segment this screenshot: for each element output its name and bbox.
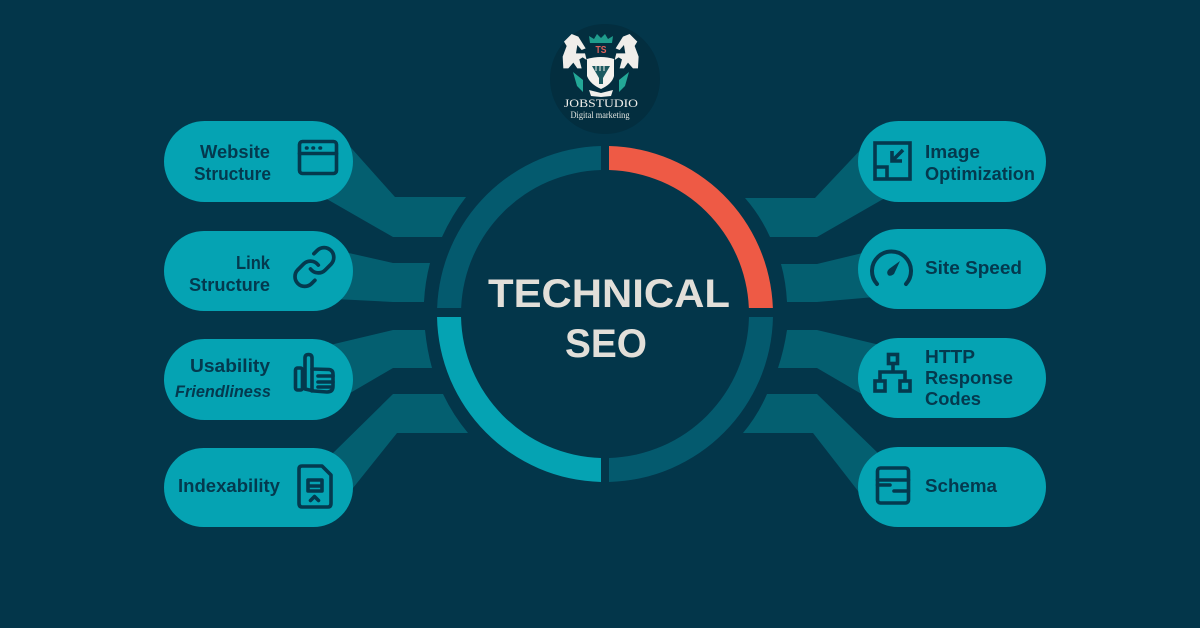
- label: image optimization: Optimization: [925, 164, 1035, 184]
- icon: resize image: [875, 143, 910, 179]
- connector: website structure: [325, 141, 466, 237]
- connector: image optimization: [745, 145, 885, 237]
- connector: http codes: [778, 330, 880, 396]
- label: site speed: Site Speed: [925, 258, 1022, 278]
- panel: site speed: [858, 229, 1046, 309]
- ring segment: bottom left: [437, 317, 601, 482]
- logo wordmark: JOBSTUDIO: [564, 96, 638, 110]
- label: indexability: Indexability: [178, 476, 280, 496]
- label: http response codes: Response: [925, 368, 1013, 388]
- panel: schema: [858, 447, 1046, 527]
- ribbon: [589, 90, 613, 97]
- title: [488, 272, 730, 366]
- icon: right leaves: [619, 72, 629, 92]
- icon: document: [299, 466, 331, 507]
- panel: website structure: [164, 121, 353, 202]
- ring segment: top right: [609, 146, 773, 308]
- logo tagline: Digital marketing: [570, 110, 630, 120]
- panel: usability friendliness: [164, 339, 353, 420]
- monogram: TS: [596, 45, 607, 56]
- connector: usability: [330, 330, 432, 396]
- label: link structure: Link: [236, 253, 271, 273]
- icon: schema layout: [878, 468, 908, 503]
- icon: left horse: [563, 34, 587, 68]
- logo: Jobstudio crest: [550, 24, 660, 134]
- icon: thumbs up: [296, 354, 333, 392]
- label: usability: Usability: [190, 356, 270, 376]
- label: image optimization: Image: [925, 142, 980, 162]
- icon: crown: [589, 34, 613, 43]
- label: http response codes: Codes: [925, 389, 981, 409]
- icon: left leaves: [573, 72, 583, 92]
- label: website structure: Website: [200, 142, 270, 162]
- panel: link structure: [164, 231, 353, 311]
- ring segment: top left: [437, 146, 601, 308]
- icon: browser window: [300, 142, 336, 174]
- label: friendliness: Friendliness: [175, 382, 271, 401]
- icon: speedometer: [872, 251, 911, 284]
- label: http response codes: HTTP: [925, 347, 975, 367]
- label: link structure: Structure: [189, 275, 270, 295]
- connector: indexability: [330, 394, 468, 498]
- panel: image optimization: [858, 121, 1046, 202]
- title: TECHNICAL: [488, 272, 730, 316]
- icon: shield: [587, 57, 614, 89]
- ring segment: bottom right: [609, 317, 773, 482]
- panel: http response codes: [858, 338, 1046, 418]
- connector: site speed: [781, 250, 875, 302]
- icon: right horse: [615, 34, 639, 68]
- title: SEO: [565, 322, 647, 366]
- connector: schema: [743, 394, 880, 500]
- icon: chain link: [295, 248, 334, 286]
- label: schema: Schema: [925, 476, 998, 496]
- ring chart: [437, 146, 773, 482]
- panel: indexability: [164, 448, 353, 527]
- connector: link structure: [335, 251, 430, 302]
- icon: sitemap: [875, 354, 910, 391]
- label: website structure: Structure: [194, 164, 271, 184]
- connectors: [325, 141, 885, 500]
